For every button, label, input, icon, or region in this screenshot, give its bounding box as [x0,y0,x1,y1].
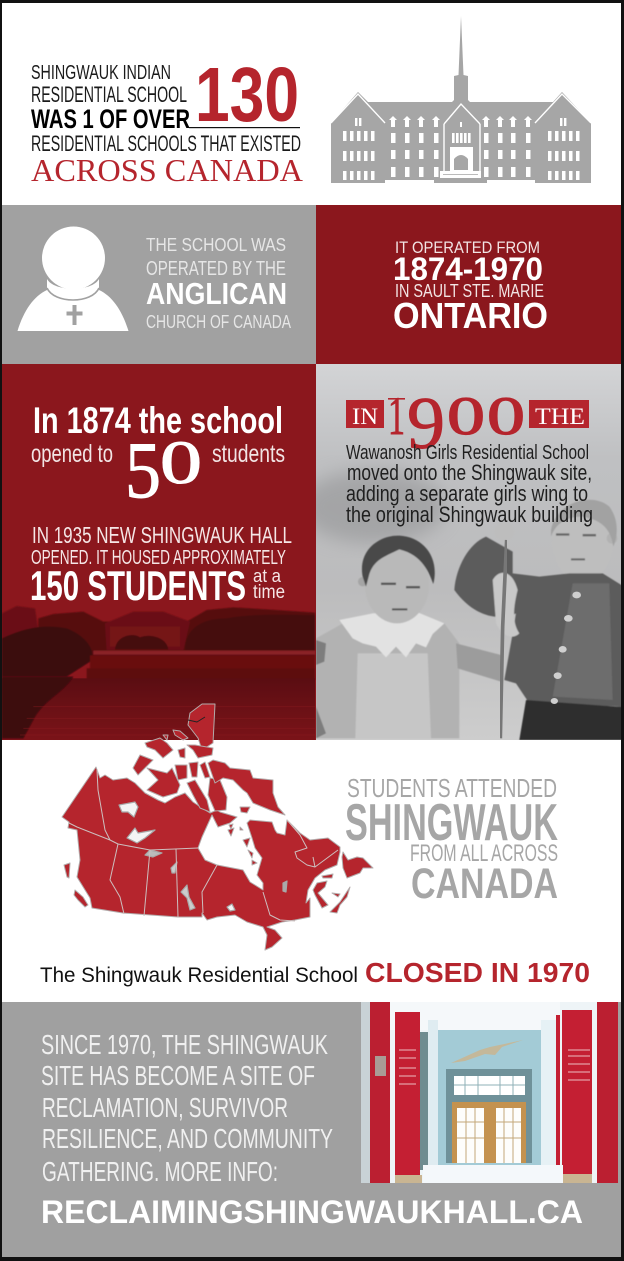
text: 1874 opened to 50 students [31,400,285,515]
panel: Anglican church [2,205,316,364]
text: In 1900 the: 0 [487,386,525,446]
panel: 1900 Wawanosh girls school [299,364,624,740]
text: closed in 1970: The Shingwauk Residential School [40,964,358,987]
text: operated by Anglican church: THE SCHOOL WAS [146,235,286,255]
text: 1935 Shingwauk Hall 150 students [30,522,292,609]
text: students attended from across Canada: STUDENTS ATTENDED [347,773,557,803]
icon: school building [331,16,591,183]
panel: header [31,16,591,188]
text: reclamation statement: SITE HAS BECOME A SITE OF [41,1060,315,1091]
text: 1935 Shingwauk Hall 150 students: OPENED. IT HOUSED APPROXIMATELY [31,547,286,569]
text: 1874 opened to 50 students: 0 [160,430,202,497]
text: closed in 1970: CLOSED IN 1970 [365,957,590,988]
text: operated by Anglican church: OPERATED BY THE [146,257,286,280]
heading: 130 schools statement [31,52,303,188]
text: 1935 Shingwauk Hall 150 students: at a [253,566,282,586]
text: students attended from across Canada: CANADA [411,860,558,908]
text: In 1900 the: IN [352,404,378,429]
heading: 130 schools statement: WAS 1 OF OVER [31,104,190,134]
text: 1935 Shingwauk Hall 150 students: 150 STUDENTS [30,562,246,609]
text: closed in 1970 [40,957,590,988]
text: 1874-1970 Ontario: 1874-1970 [393,251,543,287]
icon: priest [18,224,128,331]
text: 1935 Shingwauk Hall 150 students: time [253,582,285,603]
text: 1874 opened to 50 students: opened to [31,440,113,468]
text: 1874-1970 Ontario: IN SAULT STE. MARIE [395,281,544,301]
text: Wawanosh moved onto the site [346,442,593,527]
text: operated by Anglican church: CHURCH OF CANADA [146,311,291,332]
panel: since 1970 [2,1002,622,1257]
photo: two children [299,470,624,740]
heading: 130 schools statement: RESIDENTIAL SCHOOLS THAT EXISTED [31,131,301,156]
text: website: RECLAIMINGSHINGWAUKHALL.CA [41,1194,583,1230]
text: reclamation statement: GATHERING. MORE INFO: [42,1156,278,1187]
text: reclamation statement [41,1029,333,1187]
text: reclamation statement: SINCE 1970, THE SHINGWAUK [41,1029,328,1060]
text: In 1900 the: 1 [388,386,405,446]
text: 1874-1970 Ontario: ONTARIO [393,295,548,336]
panel: students from across Canada [40,704,590,988]
text: In 1900 the [346,383,589,465]
text: 1935 Shingwauk Hall 150 students: IN 1935 NEW SHINGWAUK HALL [32,522,292,548]
heading: 130 schools statement: 130 [195,52,299,138]
text: In 1900 the: 9 [407,383,445,465]
heading: 130 schools statement: RESIDENTIAL SCHOOL [31,82,187,107]
text: 1874 opened to 50 students: 5 [125,427,161,515]
photo: Shingwauk Hall across the water [2,606,315,740]
panel: years of operation [316,205,622,364]
text: 1874 opened to 50 students: In 1874 the school [33,400,283,441]
text: In 1900 the: 0 [447,386,485,446]
map: Canada [62,704,373,950]
photo: exhibit hallway [361,1002,618,1183]
text: operated by Anglican church [146,235,291,332]
text: 1874 opened to 50 students: students [212,440,285,468]
text: 1874-1970 Ontario: IT OPERATED FROM [395,238,540,257]
text: students attended from across Canada [345,773,558,908]
heading: 130 schools statement: SHINGWAUK INDIAN [31,62,171,84]
text: reclamation statement: RESILIENCE, AND COMMUNITY [42,1123,333,1154]
text: In 1900 the: THE [535,404,585,429]
text: 1874-1970 Ontario [393,238,548,336]
text: operated by Anglican church: ANGLICAN [146,276,287,311]
panel: 1874 and 1935 [2,364,316,740]
text: reclamation statement: RECLAMATION, SURVIVOR [42,1092,288,1123]
heading: 130 schools statement: ACROSS CANADA [31,152,303,188]
